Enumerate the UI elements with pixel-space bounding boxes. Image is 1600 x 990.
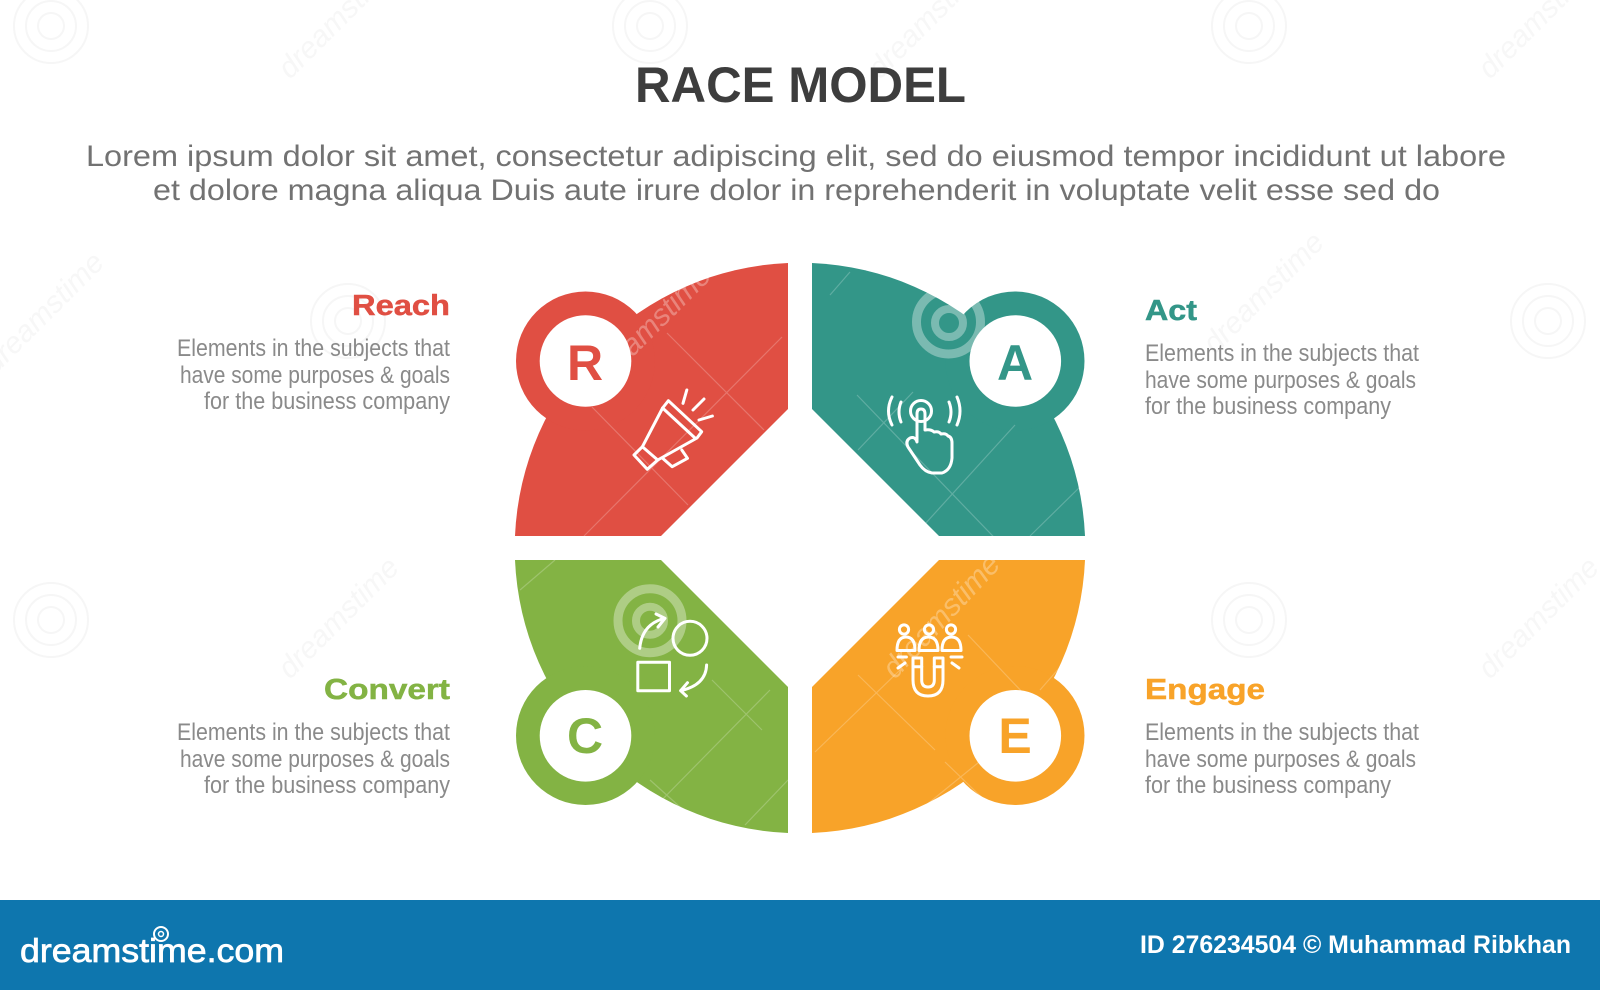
panel: E segment xyxy=(812,548,1085,833)
description: convert xyxy=(177,719,450,799)
watermark spiral xyxy=(618,589,682,653)
letter circle A xyxy=(970,315,1061,407)
heading: act: Act xyxy=(1145,295,1197,327)
panel: act text xyxy=(1145,295,1419,420)
panel: E segment: dreamstime xyxy=(876,548,1007,685)
description: reach xyxy=(177,335,450,415)
text: dreamstime xyxy=(1197,226,1331,360)
icon: megaphone xyxy=(634,390,712,469)
green quarter shape xyxy=(515,560,788,833)
description: reach: have some purposes & goals xyxy=(180,362,450,389)
letter circle R: R xyxy=(567,335,603,391)
title: RACE MODEL xyxy=(635,57,966,113)
description: reach: for the business company xyxy=(204,388,450,415)
heading: convert: Convert xyxy=(324,674,450,706)
panel: convert text xyxy=(177,674,450,799)
letter circle E: E xyxy=(998,708,1032,764)
heading: engage: Engage xyxy=(1145,674,1265,706)
description: reach: Elements in the subjects that xyxy=(177,335,450,362)
letter circle A: A xyxy=(997,335,1033,391)
description: convert: Elements in the subjects that xyxy=(177,719,450,746)
letter circle E xyxy=(970,690,1061,782)
icon: conversion shapes xyxy=(638,614,707,696)
icon: people magnet xyxy=(897,625,962,696)
subtitle text block xyxy=(86,140,1506,207)
description: engage xyxy=(1145,719,1419,799)
panel: C segment xyxy=(515,560,788,833)
panel: R segment: dreamstime xyxy=(584,259,718,393)
heading: reach: Reach xyxy=(352,290,450,322)
teal quarter shape xyxy=(812,263,1085,536)
description: act: Elements in the subjects that xyxy=(1145,340,1419,367)
watermark spiral xyxy=(916,290,980,354)
panel: engage text xyxy=(1145,674,1419,799)
footer bar xyxy=(0,900,1600,990)
orange quarter shape xyxy=(812,560,1085,833)
red quarter shape xyxy=(515,263,788,536)
letter circle C: C xyxy=(567,708,603,764)
text: dreamstime xyxy=(272,551,406,685)
panel: reach text xyxy=(177,290,450,415)
logo: dreamstime: dreamstime.com xyxy=(20,932,284,969)
description: engage: for the business company xyxy=(1145,772,1391,799)
subtitle text block: Lorem ipsum dolor sit amet, consectetur adipiscing elit, sed do eiusmod tempor incididunt ut labore xyxy=(86,140,1506,173)
description: convert: have some purposes & goals xyxy=(180,746,450,773)
icon: touch hand xyxy=(888,397,960,473)
description: convert: for the business company xyxy=(204,772,450,799)
description: act: for the business company xyxy=(1145,393,1391,420)
description: engage: have some purposes & goals xyxy=(1145,746,1416,773)
description: act: have some purposes & goals xyxy=(1145,367,1416,394)
description: engage: Elements in the subjects that xyxy=(1145,719,1419,746)
letter circle C xyxy=(540,690,631,782)
description: act xyxy=(1145,340,1419,420)
panel: R segment xyxy=(515,259,788,536)
letter circle R xyxy=(540,315,631,407)
panel: A segment xyxy=(812,263,1085,585)
subtitle text block: et dolore magna aliqua Duis aute irure dolor in reprehenderit in voluptate velit esse sed do xyxy=(153,174,1440,207)
image credit: ID 276234504 © Muhammad Ribkhan xyxy=(1140,931,1571,959)
